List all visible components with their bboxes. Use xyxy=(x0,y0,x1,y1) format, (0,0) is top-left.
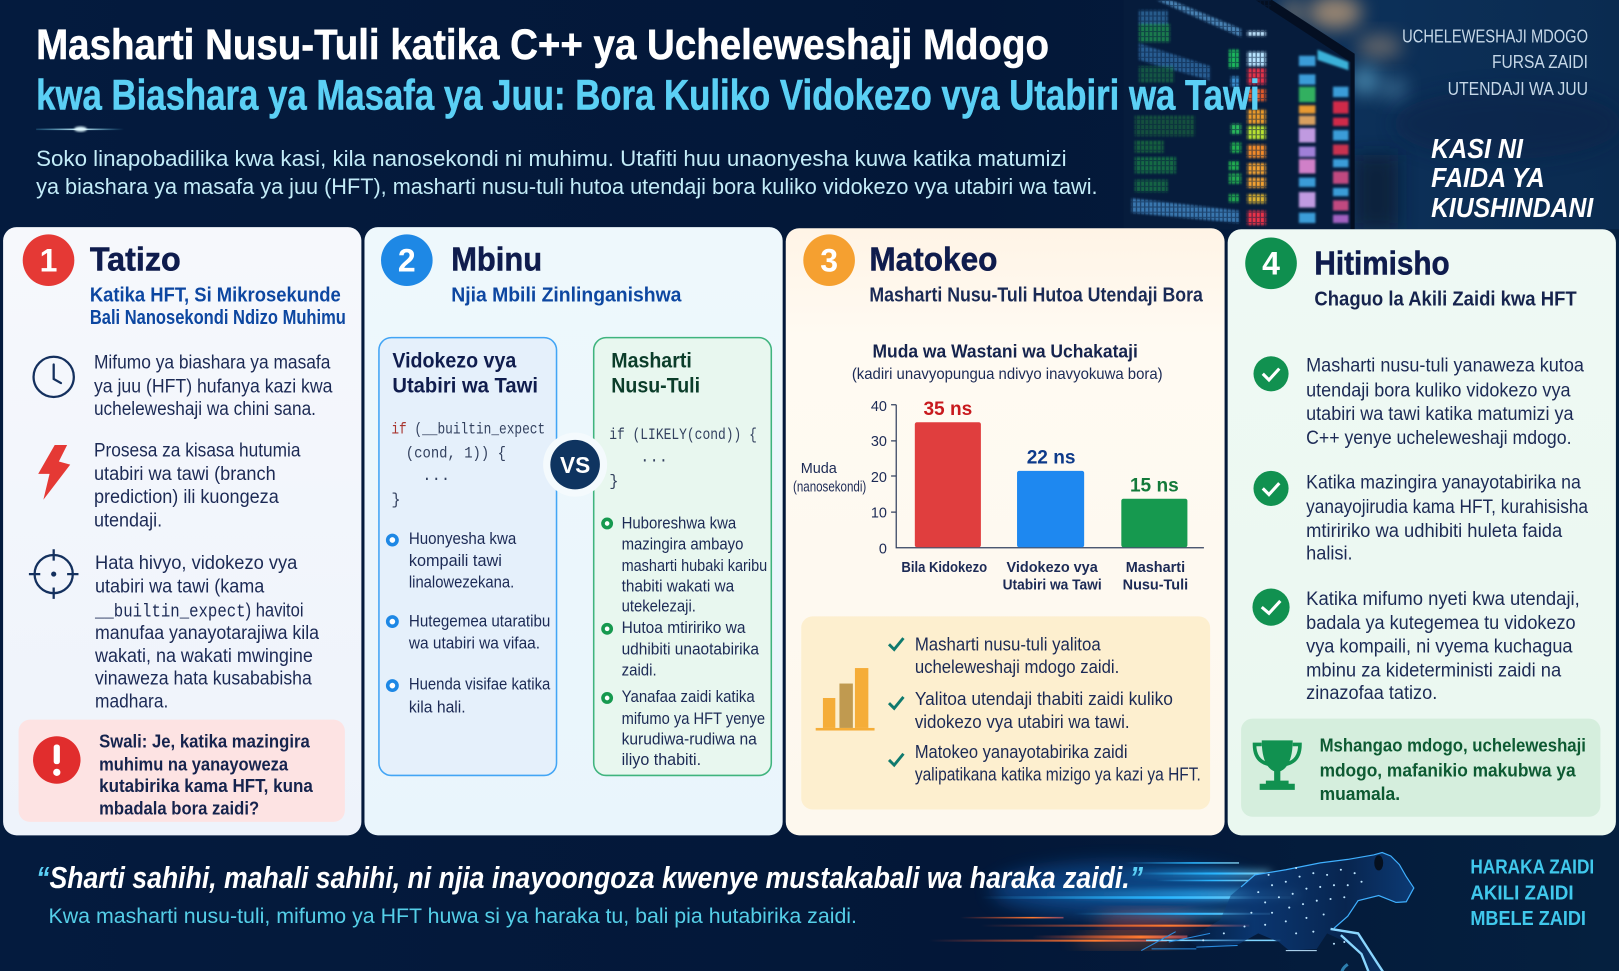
heading: hitimisho: Chaguo la Akili Zaidi kwa HFT xyxy=(1314,289,1577,311)
footer subtext: Kwa masharti nusu-tuli, mifumo ya HFT huwa si ya haraka tu, bali pia hutabirika zaidi. xyxy=(49,903,857,928)
slogan: KASI NI xyxy=(1431,133,1524,164)
text: builtin expect: manufaa yanayotarajiwa kila xyxy=(95,622,319,644)
text: HFT latency: ya juu (HFT) hufanya kazi kwa xyxy=(94,375,333,397)
slogan: FAIDA YA xyxy=(1431,162,1545,193)
box: semi-static conditions: if (LIKELY(cond)) { xyxy=(609,426,757,444)
bar chart: processing time: Bila Kidokezo xyxy=(901,560,987,576)
footer tagline xyxy=(1470,856,1594,930)
heading: tatizo: Bali Nanosekondi Ndizo Muhimu xyxy=(90,307,346,329)
callout: question: kutabirika kama HFT, kuna xyxy=(99,775,313,796)
conclusion 1: utabiri wa tawi katika matumizi ya xyxy=(1306,403,1574,425)
bar chart: processing time: 15 ns xyxy=(1130,475,1179,496)
box: branch hints xyxy=(379,338,557,775)
box: branch hints: ... xyxy=(422,467,450,485)
bar chart: processing time: Nusu-Tuli xyxy=(1123,578,1188,594)
text: builtin expect: utabiri wa tawi (kama xyxy=(95,576,264,598)
intro text: Soko linapobadilika kwa kasi, kila nanosekondi ni muhimu. Utafiti huu unaonyesha kuwa katika matumizi xyxy=(36,146,1067,171)
conclusion 1: C++ yenye ucheleweshaji mdogo. xyxy=(1306,427,1572,449)
conclusion 3: Katika mifumo nyeti kwa utendaji, xyxy=(1306,588,1580,610)
bar chart: processing time: 30 xyxy=(871,434,887,450)
callout: question xyxy=(19,720,345,822)
callout: key findings: vidokezo vya utabiri wa tawi. xyxy=(915,712,1130,732)
bar chart: processing time: 22 ns xyxy=(1027,448,1076,469)
box: semi-static conditions xyxy=(594,338,771,775)
conclusion 2 xyxy=(1253,471,1588,565)
text: branch prediction: prediction) ili kuongeza xyxy=(94,486,279,508)
callout: key findings: Yalitoa utendaji thabiti zaidi kuliko xyxy=(915,689,1173,709)
icon: target xyxy=(29,549,78,599)
box: branch hints: linalowezekana. xyxy=(409,573,514,592)
icon: cheetah xyxy=(1141,853,1414,971)
box: semi-static conditions: masharti hubaki karibu xyxy=(622,556,767,575)
text: builtin expect xyxy=(94,552,319,712)
box: semi-static conditions: } xyxy=(609,472,618,490)
badge 4: 4 xyxy=(1262,246,1280,282)
top right keywords: UTENDAJI WA JUU xyxy=(1448,79,1588,99)
title accent line xyxy=(36,126,124,132)
bar chart: processing time: Muda xyxy=(801,461,838,477)
text: branch prediction xyxy=(94,439,301,532)
heading: tatizo xyxy=(90,242,346,329)
heading: mbinu: Njia Mbili Zinlinganishwa xyxy=(451,285,682,307)
bar chart: processing time: 0 xyxy=(879,541,887,557)
footer quote: “Sharti sahihi, mahali sahihi, ni njia inayoongoza kwenye mustakabali wa haraka zaidi.” xyxy=(36,860,1143,895)
bar chart: processing time: 35 ns xyxy=(923,399,972,420)
heading: hitimisho xyxy=(1314,246,1577,311)
text: branch prediction: utabiri wa tawi (branch xyxy=(94,463,276,485)
bar chart: processing time: (kadiri unavyopungua ndivyo inavyokuwa bora) xyxy=(852,366,1163,383)
bar chart: processing time: Utabiri wa Tawi xyxy=(1003,578,1102,594)
text: branch prediction: utendaji. xyxy=(94,510,162,532)
vs badge xyxy=(543,433,607,497)
conclusion 1: Masharti nusu-tuli yanaweza kutoa xyxy=(1306,355,1584,377)
text: HFT latency: ucheleweshaji wa chini sana. xyxy=(94,398,316,420)
box: branch hints: Huenda visifae katika xyxy=(409,675,551,694)
title xyxy=(36,21,1260,118)
box: branch hints: kila hali. xyxy=(409,697,466,716)
illustration: speed streaks and cheetah xyxy=(929,853,1414,971)
icon: lightning bolt xyxy=(38,445,70,500)
box: branch hints: kompaili tawi xyxy=(409,551,502,570)
conclusion 2: mtiririko wa udhibiti huleta faida xyxy=(1306,520,1562,542)
bar chart: processing time: Vidokezo vya xyxy=(1007,560,1099,576)
box: semi-static conditions: utekelezaji. xyxy=(622,596,696,615)
bar chart: processing time: 10 xyxy=(871,505,887,521)
bar chart: processing time: Muda wa Wastani wa Uchakataji xyxy=(872,340,1138,361)
callout: takeaway: Mshangao mdogo, ucheleweshaji xyxy=(1320,735,1586,756)
conclusion 2: yanayojirudia kama HFT, kurahisisha xyxy=(1306,496,1588,518)
box: branch hints: Huonyesha kwa xyxy=(409,529,517,548)
box: semi-static conditions: kurudiwa-rudiwa na xyxy=(622,729,757,748)
callout: question: Swali: Je, katika mazingira xyxy=(99,731,310,752)
title: kwa Biashara ya Masafa ya Juu: Bora Kuliko Vidokezo vya Utabiri wa Tawi xyxy=(36,71,1260,118)
box: semi-static conditions: Nusu-Tuli xyxy=(611,372,700,397)
title: Masharti Nusu-Tuli katika C++ ya Ucheleweshaji Mdogo xyxy=(36,21,1049,68)
conclusion 3 xyxy=(1252,588,1580,704)
footer tagline: MBELE ZAIDI xyxy=(1470,907,1586,930)
box: branch hints: Utabiri wa Tawi xyxy=(392,372,538,397)
text: builtin expect: madhara. xyxy=(95,690,168,712)
box: branch hints: wa utabiri wa vifaa. xyxy=(408,633,540,652)
bar chart: processing time: 40 xyxy=(871,399,887,415)
icon: clock xyxy=(34,357,74,397)
conclusion 2: halisi. xyxy=(1306,543,1353,565)
callout: takeaway: muamala. xyxy=(1320,783,1400,804)
callout: question: mbadala bora zaidi? xyxy=(99,798,259,819)
callout: key findings: Matokeo yanayotabirika zaidi xyxy=(915,742,1128,762)
conclusion 1 xyxy=(1253,355,1584,449)
box: semi-static conditions: udhibiti unaotabirika xyxy=(622,640,759,659)
callout: takeaway: mdogo, mafanikio makubwa ya xyxy=(1320,759,1576,780)
heading: matokeo: Matokeo xyxy=(869,242,997,279)
conclusion 3: vya kompaili, ni vyema kuchagua xyxy=(1306,636,1573,658)
callout: key findings: ucheleweshaji mdogo zaidi. xyxy=(915,657,1119,677)
box: branch hints: } xyxy=(391,491,401,509)
text: builtin expect: wakati, na wakati mwingine xyxy=(94,645,313,667)
bar chart: processing time: (nanosekondi) xyxy=(793,479,866,495)
text: builtin expect: Hata hivyo, vidokezo vya xyxy=(95,552,297,574)
heading: hitimisho: Hitimisho xyxy=(1314,246,1450,283)
callout: takeaway xyxy=(1241,719,1600,817)
text: builtin expect: __builtin_expect) havitoi xyxy=(94,599,304,622)
panel: mbinu xyxy=(364,227,783,835)
bar chart: processing time xyxy=(793,340,1204,594)
top right keywords xyxy=(1402,26,1588,99)
heading: tatizo: Katika HFT, Si Mikrosekunde xyxy=(90,285,341,307)
text: HFT latency: Mifumo ya biashara ya masafa xyxy=(94,352,330,374)
box: semi-static conditions: mazingira ambayo xyxy=(622,534,743,553)
bar chart: processing time: 20 xyxy=(871,470,887,486)
footer tagline: AKILI ZAIDI xyxy=(1470,881,1574,904)
box: semi-static conditions: Yanafaa zaidi katika xyxy=(622,687,755,706)
box: semi-static conditions: mifumo ya HFT yenye xyxy=(622,709,765,728)
vs badge: VS xyxy=(560,452,590,478)
heading: matokeo xyxy=(869,242,1204,307)
box: branch hints: if (__builtin_expect xyxy=(391,421,545,439)
badge 4 xyxy=(1245,237,1297,289)
box: semi-static conditions: thabiti wakati wa xyxy=(622,577,735,596)
intro text xyxy=(36,146,1098,199)
box: branch hints: (cond, 1)) { xyxy=(406,444,506,462)
box: semi-static conditions: iliyo thabiti. xyxy=(622,750,701,769)
panel: matokeo xyxy=(786,228,1225,835)
heading: mbinu xyxy=(451,242,682,307)
callout: key findings: Masharti nusu-tuli yalitoa xyxy=(915,634,1102,654)
panel: hitimisho xyxy=(1228,229,1616,835)
slogan xyxy=(1431,133,1594,223)
heading: tatizo: Tatizo xyxy=(90,242,181,279)
text: builtin expect: vinaweza hata kusababisha xyxy=(95,668,312,690)
badge 2: 2 xyxy=(398,243,416,279)
box: branch hints: Vidokezo vya xyxy=(392,348,517,373)
bar chart: processing time: Masharti xyxy=(1126,560,1185,576)
callout: key findings xyxy=(801,616,1210,810)
box: semi-static conditions: zaidi. xyxy=(622,660,657,679)
top right keywords: FURSA ZAIDI xyxy=(1492,52,1588,72)
slogan: KIUSHINDANI xyxy=(1431,192,1594,223)
heading: matokeo: Masharti Nusu-Tuli Hutoa Utendaji Bora xyxy=(869,285,1204,307)
icon: trophy xyxy=(1255,740,1300,790)
box: semi-static conditions: ... xyxy=(640,449,668,467)
background: trading monitor and bokeh xyxy=(1123,0,1619,229)
text: branch prediction: Prosesa za kisasa hutumia xyxy=(94,439,301,461)
conclusion 3: badala ya kutegemea tu vidokezo xyxy=(1306,612,1576,634)
text: HFT latency xyxy=(94,352,333,420)
badge 1: 1 xyxy=(40,243,57,279)
conclusion 2: Katika mazingira yanayotabirika na xyxy=(1306,471,1581,493)
callout: question: muhimu na yanayoweza xyxy=(99,753,289,774)
box: semi-static conditions: Masharti xyxy=(611,348,692,373)
callout: key findings: yalipatikana katika mizigo ya kazi ya HFT. xyxy=(915,765,1201,785)
badge 1 xyxy=(23,234,74,286)
badge 3 xyxy=(803,234,855,286)
conclusion 3: zinazofaa tatizo. xyxy=(1306,682,1437,704)
box: semi-static conditions: Huboreshwa kwa xyxy=(622,514,737,533)
box: branch hints: Hutegemea utaratibu xyxy=(409,612,550,631)
box: semi-static conditions: Hutoa mtiririko wa xyxy=(622,618,746,637)
heading: mbinu: Mbinu xyxy=(451,242,542,279)
panel: tatizo xyxy=(3,227,361,835)
footer tagline: HARAKA ZAIDI xyxy=(1470,856,1594,879)
conclusion 3: mbinu za kideterministi zaidi na xyxy=(1306,659,1561,681)
icon: small bar chart xyxy=(816,668,875,731)
conclusion 1: utendaji bora kuliko vidokezo vya xyxy=(1306,379,1571,401)
badge 3: 3 xyxy=(820,243,838,279)
intro text: ya biashara ya masafa ya juu (HFT), masharti nusu-tuli hutoa utendaji bora kuliko vidokezo vya utabiri wa tawi. xyxy=(36,174,1098,199)
badge 2 xyxy=(381,234,433,286)
